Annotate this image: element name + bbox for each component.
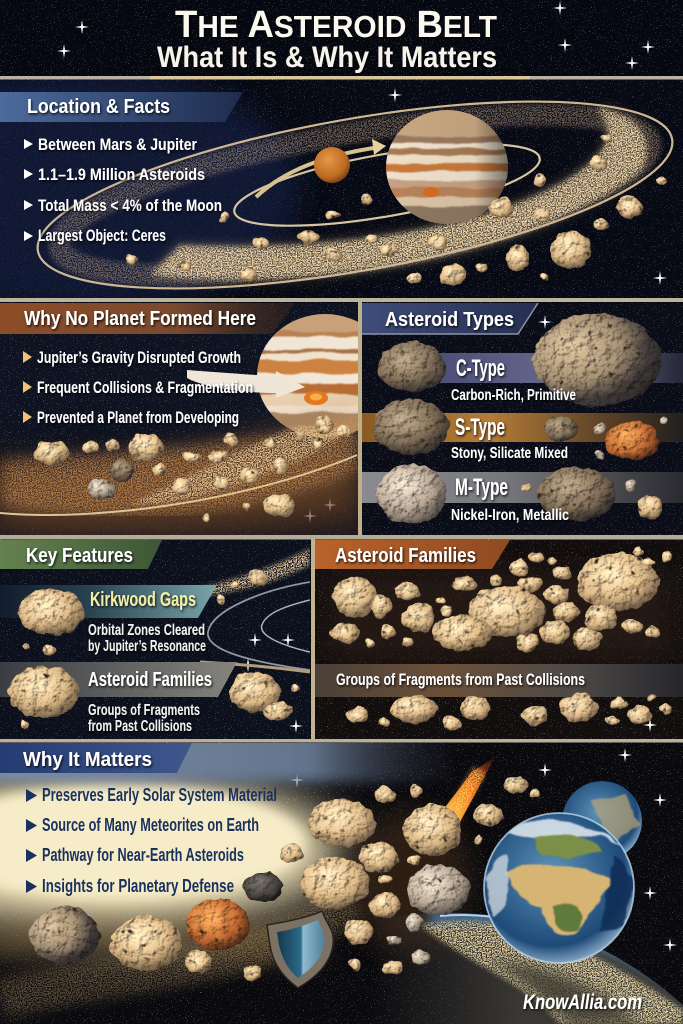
heading: why no planet formed here <box>0 303 295 334</box>
families description: Groups of Fragments <box>88 702 200 719</box>
c-type label: Carbon-Rich, Primitive <box>451 387 576 404</box>
asteroids around the belt <box>125 134 667 286</box>
facts list <box>24 135 222 245</box>
heading: location and facts <box>0 92 243 122</box>
panel: asteroid families <box>315 540 683 731</box>
m-type label <box>451 474 569 524</box>
warm backdrop glow <box>330 570 670 660</box>
facts list: 1.1–1.9 Million Asteroids <box>38 165 205 184</box>
reasons list <box>26 785 277 896</box>
mars orbit arrow <box>256 139 386 197</box>
heading: asteroid families <box>315 540 510 569</box>
heading: asteroid families: Asteroid Families <box>335 545 476 567</box>
fragment cluster <box>331 548 674 731</box>
title: THE ASTEROID BELT <box>175 4 497 46</box>
meteor <box>443 757 495 822</box>
heading: key features <box>0 540 162 569</box>
reasons list <box>23 348 253 427</box>
asteroid belt ring <box>36 100 674 290</box>
belt arc and orbits <box>197 546 310 674</box>
asteroids <box>373 314 668 524</box>
small earth <box>562 781 642 861</box>
heading: why no planet formed here: Why No Planet Formed Here <box>24 308 256 330</box>
site credit: KnowAllia.com <box>523 991 642 1014</box>
mars <box>314 147 350 183</box>
heading: why it matters <box>0 743 192 773</box>
heading: why it matters: Why It Matters <box>23 749 152 771</box>
caption band: Groups of Fragments from Past Collisions <box>336 671 585 689</box>
m-type label: Nickel-Iron, Metallic <box>451 507 569 524</box>
reasons list: Preserves Early Solar System Material <box>42 785 277 805</box>
belt dust and orbit line <box>0 410 358 530</box>
m-type label: M-Type <box>455 474 508 501</box>
fragments <box>33 416 351 521</box>
large earth rim <box>484 813 634 963</box>
panel: why no planet formed here <box>0 303 358 535</box>
jupiter <box>386 110 508 224</box>
band: asteroid families <box>0 662 237 697</box>
kirkwood description: Orbital Zones Cleared <box>88 622 205 639</box>
label: asteroid families: Asteroid Families <box>88 669 212 691</box>
label: kirkwood gaps: Kirkwood Gaps <box>90 589 196 611</box>
horizon planet <box>360 900 683 1024</box>
reasons list: Jupiter’s Gravity Disrupted Growth <box>37 348 241 367</box>
panel: key features <box>0 540 310 735</box>
reasons list: Insights for Planetary Defense <box>42 876 234 896</box>
c-type label: C-Type <box>456 355 505 382</box>
s-type label: S-Type <box>455 414 505 441</box>
kirkwood description <box>88 622 206 655</box>
panel: why it matters <box>0 732 683 1024</box>
type bands <box>362 353 683 503</box>
families description: from Past Collisions <box>88 718 192 735</box>
families description <box>88 702 200 735</box>
c-type label <box>451 355 576 404</box>
arrow toward jupiter <box>187 370 305 398</box>
reasons list: Pathway for Near-Earth Asteroids <box>42 845 244 865</box>
heading: key features: Key Features <box>26 545 133 567</box>
heading: asteroid types: Asteroid Types <box>385 309 514 331</box>
warm glow backdrop <box>0 732 470 1000</box>
title <box>157 4 497 74</box>
panel: location and facts <box>0 80 674 298</box>
heading: asteroid types <box>362 303 538 334</box>
reasons list: Frequent Collisions & Fragmentation <box>37 378 253 397</box>
reasons list: Prevented a Planet from Developing <box>37 408 239 427</box>
s-type label: Stony, Silicate Mixed <box>451 445 568 462</box>
kirkwood description: by Jupiter’s Resonance <box>88 638 206 655</box>
large earth <box>484 813 636 963</box>
s-type label <box>451 414 568 462</box>
panel: asteroid types <box>362 303 683 524</box>
asteroid swarm <box>30 776 541 981</box>
jupiter <box>257 314 358 438</box>
caption band <box>315 664 683 697</box>
facts list: Between Mars & Jupiter <box>38 135 197 154</box>
heading: location and facts: Location & Facts <box>27 96 170 118</box>
facts list: Total Mass < 4% of the Moon <box>38 196 222 215</box>
title: What It Is & Why It Matters <box>157 41 497 74</box>
band: kirkwood gaps <box>0 585 217 618</box>
rocks <box>9 570 300 728</box>
facts list: Largest Object: Ceres <box>38 226 166 245</box>
reasons list: Source of Many Meteorites on Earth <box>42 815 259 835</box>
icon: shield <box>267 911 333 988</box>
